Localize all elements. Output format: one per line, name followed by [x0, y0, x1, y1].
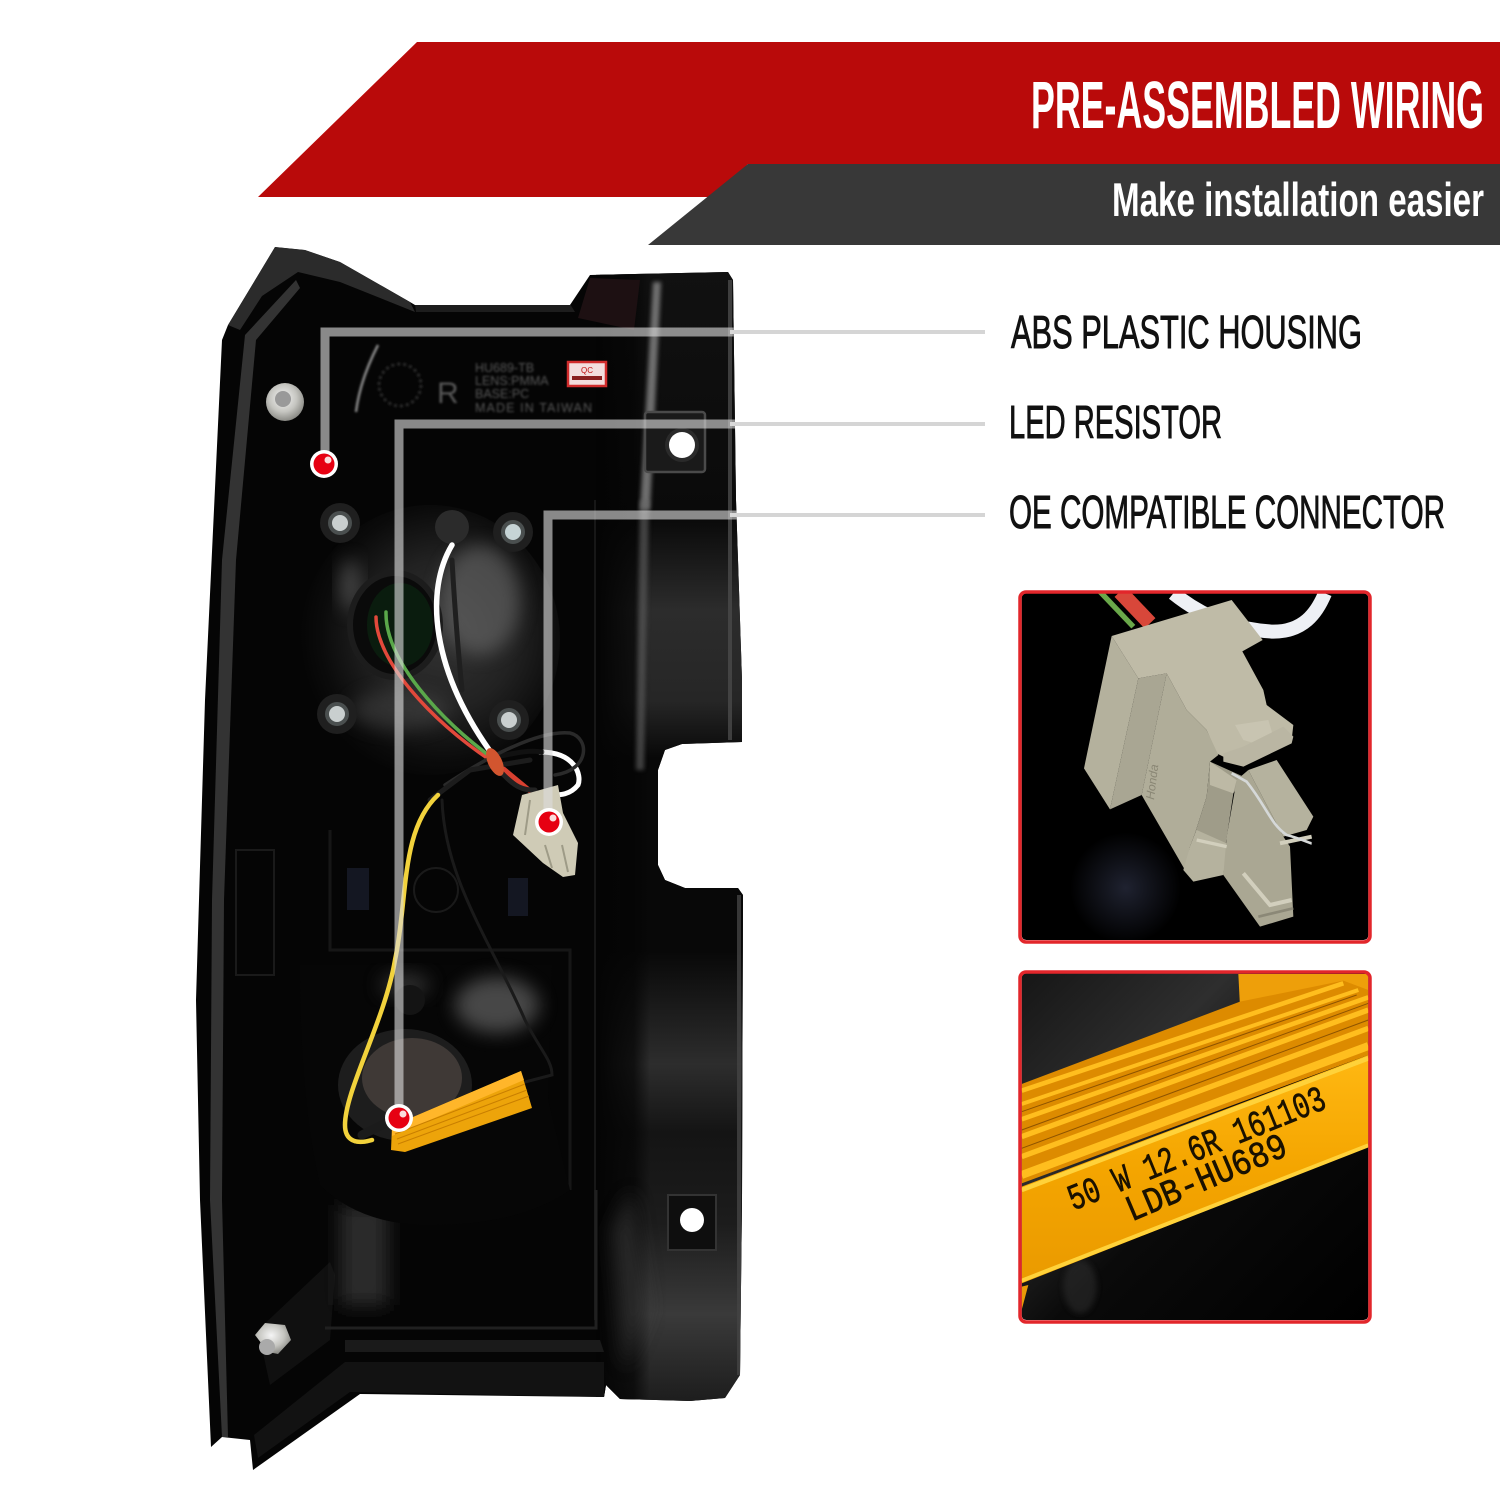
header banner: red [258, 42, 1500, 197]
wiring harness [345, 510, 584, 1142]
callout lines [325, 332, 985, 1118]
molded lamp text: HU689-TB [475, 361, 534, 375]
resistor mounting tab [1238, 974, 1368, 1002]
resistor fins [1022, 981, 1368, 1183]
header banner: dark [648, 164, 1500, 245]
callout dot: housing [310, 450, 338, 478]
mounting stud bottom [255, 1323, 291, 1355]
mounting hole upper [645, 412, 705, 472]
tail lamp rear view [196, 247, 750, 1470]
connector body [1084, 600, 1313, 927]
mini resistor [391, 1071, 532, 1152]
molded lamp text: BASE:PC [475, 387, 529, 401]
center dome [326, 513, 560, 756]
connector wires [1100, 592, 1325, 632]
resistor printing: LDB-HU689 [1120, 1127, 1294, 1233]
molded lamp text: MADE IN TAIWAN [475, 401, 592, 415]
QC sticker: QC [581, 366, 593, 375]
resistor flat face [1022, 1055, 1368, 1283]
mounting hole lower [668, 1195, 716, 1250]
inset border: resistor [1020, 972, 1370, 1322]
molded lamp text [356, 345, 592, 415]
resistor printing: 50 W 12.6R 161103 [1062, 1080, 1333, 1222]
label: resistor: LED RESISTOR [1009, 396, 1222, 448]
lower bowl [342, 1185, 570, 1222]
resistor printing [1066, 1087, 1326, 1221]
screw bosses [317, 503, 533, 740]
wire hole [350, 573, 440, 677]
connector metal clip [1232, 773, 1312, 843]
callout dot: connector [535, 808, 563, 836]
lower socket [338, 1029, 472, 1141]
inset panel: connector photo [1022, 592, 1368, 940]
inset panel: resistor photo [1022, 973, 1368, 1320]
lamp right flange [600, 270, 750, 1405]
molded lamp text: R [437, 377, 459, 410]
mini connector [513, 785, 578, 877]
mounting stud top [266, 383, 304, 421]
inset border: connector [1020, 592, 1370, 942]
callout dot: resistor [385, 1104, 413, 1132]
connector embossed mark: Honda [1143, 763, 1161, 800]
molded lamp text: LENS:PMMA [475, 374, 549, 388]
QC sticker [568, 362, 606, 386]
